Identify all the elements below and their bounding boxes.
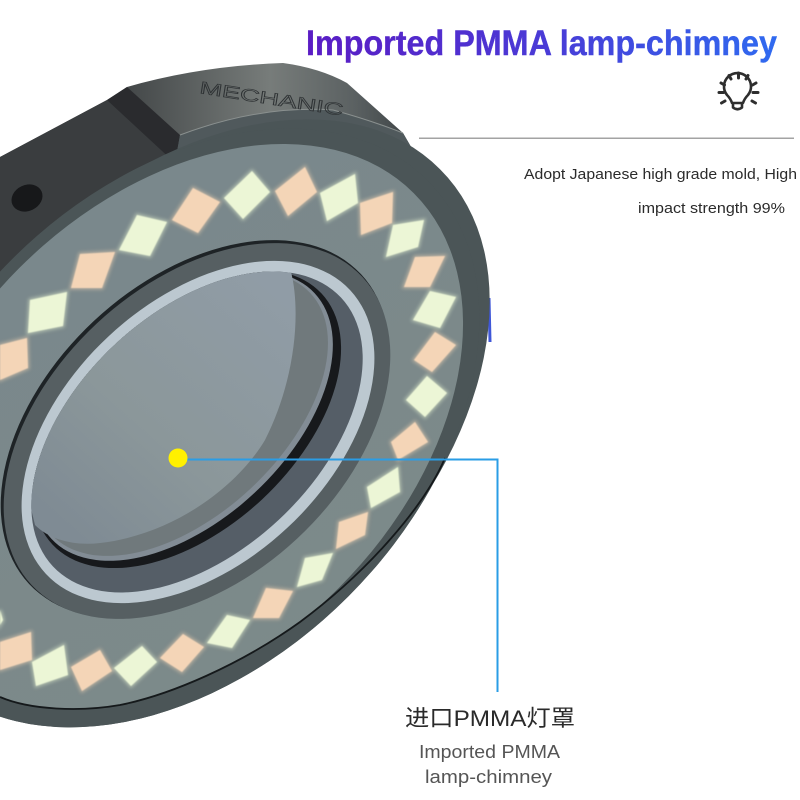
description text: impact strength 99% <box>638 201 785 217</box>
body rim lower <box>0 129 479 727</box>
housing dark block <box>0 100 177 290</box>
divider line <box>419 138 794 139</box>
silver ring <box>0 194 439 670</box>
ring face <box>0 144 463 712</box>
product: ring light <box>0 63 520 735</box>
icon: light bulb <box>719 73 758 109</box>
rim band below black edge <box>0 482 434 728</box>
lens glass <box>31 272 342 568</box>
housing side <box>0 63 450 500</box>
lens cavity <box>0 210 423 654</box>
description text: Adopt Japanese high grade mold, High <box>524 167 797 183</box>
callout label: lamp-chimney <box>425 767 552 787</box>
callout label: 进口PMMA灯罩 <box>405 706 575 731</box>
housing lower band <box>175 109 420 220</box>
callout label <box>405 706 575 787</box>
blue edge accents <box>411 150 490 342</box>
housing dark stripe <box>107 87 180 163</box>
callout label: Imported PMMA <box>419 742 560 762</box>
callout leader line <box>178 460 498 692</box>
black edge line <box>0 458 445 709</box>
body rim <box>0 119 490 717</box>
brand engraving: MECHANIC <box>198 78 345 120</box>
small screw hole <box>7 179 47 217</box>
LED diamonds <box>0 167 456 691</box>
description text <box>524 167 797 217</box>
callout marker <box>168 448 188 468</box>
housing highlight <box>180 109 403 135</box>
lens groove <box>0 166 462 692</box>
